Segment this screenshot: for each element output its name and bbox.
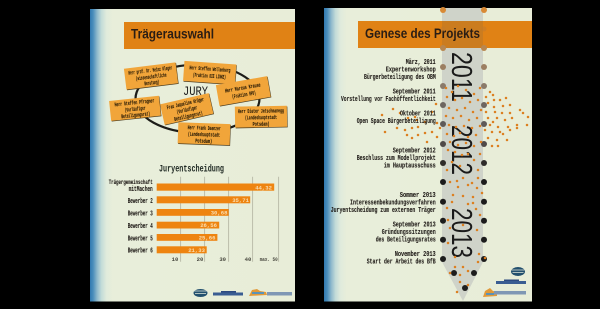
- bar values: 26,56: [200, 222, 218, 229]
- timeline entry: Oktober 2011: Oktober 2011: [400, 110, 436, 118]
- note: Wollenberg: [183, 61, 237, 85]
- bar labels: Bewerber 5: [128, 235, 153, 243]
- note: Krüger: [160, 93, 214, 126]
- bar values: 25,66: [199, 235, 216, 242]
- bar labels: Bewerber 4: [128, 223, 153, 231]
- jury label: JURY: [183, 84, 208, 99]
- bar values: 44,32: [255, 184, 273, 192]
- bar values: [188, 184, 273, 254]
- timeline entry: September 2012: September 2012: [393, 148, 436, 156]
- bar labels: Bewerber 2: [128, 198, 153, 206]
- note: Kleger: (wissenschaftliche: [135, 72, 167, 82]
- logos: [194, 289, 292, 297]
- note: Daenzer: Herr Frank Daenzer: [188, 124, 221, 132]
- note: Jetschmanegg: Herr Dieter Jetschmanegg: [238, 107, 284, 115]
- note: Jetschmanegg: (Landeshauptstadt: [245, 114, 277, 121]
- timeline ribbon: [442, 8, 483, 301]
- timeline entry: Oktober 2011: [357, 110, 436, 126]
- timeline entry: Oktober 2011: Open Space Bürgerbeteiligung: [357, 118, 436, 126]
- timeline entry: September 2011: Vorstellung vor Fachöffentlichkeit: [341, 96, 436, 104]
- heading banner: Genese des Projekts: Genese des Projekts: [365, 25, 480, 41]
- bar values: 21,33: [188, 247, 206, 254]
- timeline entry: März 2011: März, 2011: [406, 59, 436, 67]
- panel: Genese des Projekts: [324, 7, 532, 302]
- timeline entry: März 2011: [364, 59, 436, 82]
- year labels: 2012: [445, 125, 477, 175]
- year labels: 2011: [445, 52, 477, 102]
- axis labels: [172, 256, 278, 263]
- panel: Trägerauswahl: [90, 9, 295, 302]
- axis labels: 10: [172, 256, 179, 263]
- heading banner: Trägerauswahl: Trägerauswahl: [131, 26, 214, 42]
- bar labels: Trägergemeinschaft: [109, 179, 153, 186]
- year labels: [445, 52, 477, 258]
- timeline entry: September 2013: [376, 222, 436, 244]
- note: Krause: (Fraktion SPD): [232, 89, 256, 100]
- bar values: 30,68: [211, 210, 228, 217]
- timeline entry: März 2011: Expertenworkshop: [386, 66, 436, 74]
- chart title: Juryentscheidung: [159, 164, 224, 176]
- note: Krause: [216, 76, 271, 107]
- note: Pfrogner: (Vorläufiger: [124, 105, 146, 114]
- heading banner: Genese des Projekts: [358, 21, 532, 48]
- bars: [157, 184, 274, 253]
- note: Krüger: Frau Jaqueline Krüger: [166, 96, 205, 111]
- timeline entry: Sommer 2013: Interessenbekundungsverfahren: [350, 200, 436, 208]
- note: Jetschmanegg: [235, 106, 288, 128]
- note: Daenzer: (Landeshauptstadt: [188, 131, 220, 139]
- bar labels: [109, 179, 153, 256]
- heading banner: Trägerauswahl: [124, 22, 295, 49]
- note: Daenzer: [178, 122, 231, 146]
- timeline entry: September 2012: im Hauptausschuss: [384, 162, 436, 170]
- timeline dots: [440, 7, 487, 291]
- scattered orange dots: [382, 86, 528, 292]
- logos: [483, 267, 526, 297]
- axis labels: 30: [219, 256, 227, 263]
- note: Krüger: Beteiligungsrat): [173, 110, 203, 123]
- note: Wollenberg: Herr Steffen Wollenberg: [189, 64, 231, 74]
- timeline entry: Sommer 2013: Juryentscheidung zum externen Träger: [331, 207, 436, 215]
- axis labels: 40: [245, 256, 252, 263]
- note: Kleger: Herr prof. Dr. Heinz Kleger: [128, 64, 173, 77]
- bar labels: Bewerber 3: [128, 210, 153, 218]
- bar labels: mitMachen: [129, 186, 153, 194]
- timeline entry: November 2013: [367, 251, 436, 266]
- chart: Juryentscheidung: [109, 164, 279, 263]
- note: Wollenberg: (Fraktion DIE LINKE): [193, 72, 226, 81]
- timeline entry: September 2013: des Beteiligungsrates: [376, 236, 436, 244]
- timeline entry: September 2012: [357, 148, 436, 170]
- timeline entry: November 2013: November 2013: [395, 251, 436, 259]
- note: Pfrogner: Herr Steffen Pfrogner: [114, 97, 155, 108]
- timeline entry: September 2011: [341, 88, 436, 104]
- timeline entry: Sommer 2013: Sommer 2013: [400, 192, 436, 200]
- note: Kleger: Beratung): [144, 79, 160, 87]
- note: Jetschmanegg: Potsdam): [253, 121, 270, 128]
- timeline entry: September 2013: Gründungssitzungen: [382, 229, 436, 237]
- note: Kleger: [124, 62, 179, 90]
- axis labels: 20: [197, 256, 204, 263]
- axis labels: max. 50: [260, 256, 278, 263]
- note: Pfrogner: [109, 96, 161, 122]
- timeline entry: September 2013: September 2013: [393, 222, 436, 230]
- timeline entry: September 2011: September 2011: [393, 88, 436, 96]
- bar labels: Bewerber 6: [128, 248, 153, 256]
- timeline entry: November 2013: Start der Arbeit des BfB: [367, 258, 436, 266]
- timeline entry: Sommer 2013: [331, 192, 436, 215]
- year labels: 2013: [445, 208, 477, 258]
- timeline entry: März 2011: Bürgerbeteiligung des OBM: [364, 74, 436, 82]
- note: Pfrogner: Beteiligungsrat): [121, 110, 151, 120]
- note: Daenzer: Potsdam): [195, 137, 212, 145]
- bar values: 35,71: [232, 197, 250, 204]
- note: Krause: Herr Marcus Krause: [224, 81, 261, 95]
- note: Krüger: (Vorläufiger: [176, 104, 198, 116]
- timeline entry: September 2012: Beschluss zum Modellprojekt: [357, 155, 436, 163]
- jury ring: [136, 65, 260, 133]
